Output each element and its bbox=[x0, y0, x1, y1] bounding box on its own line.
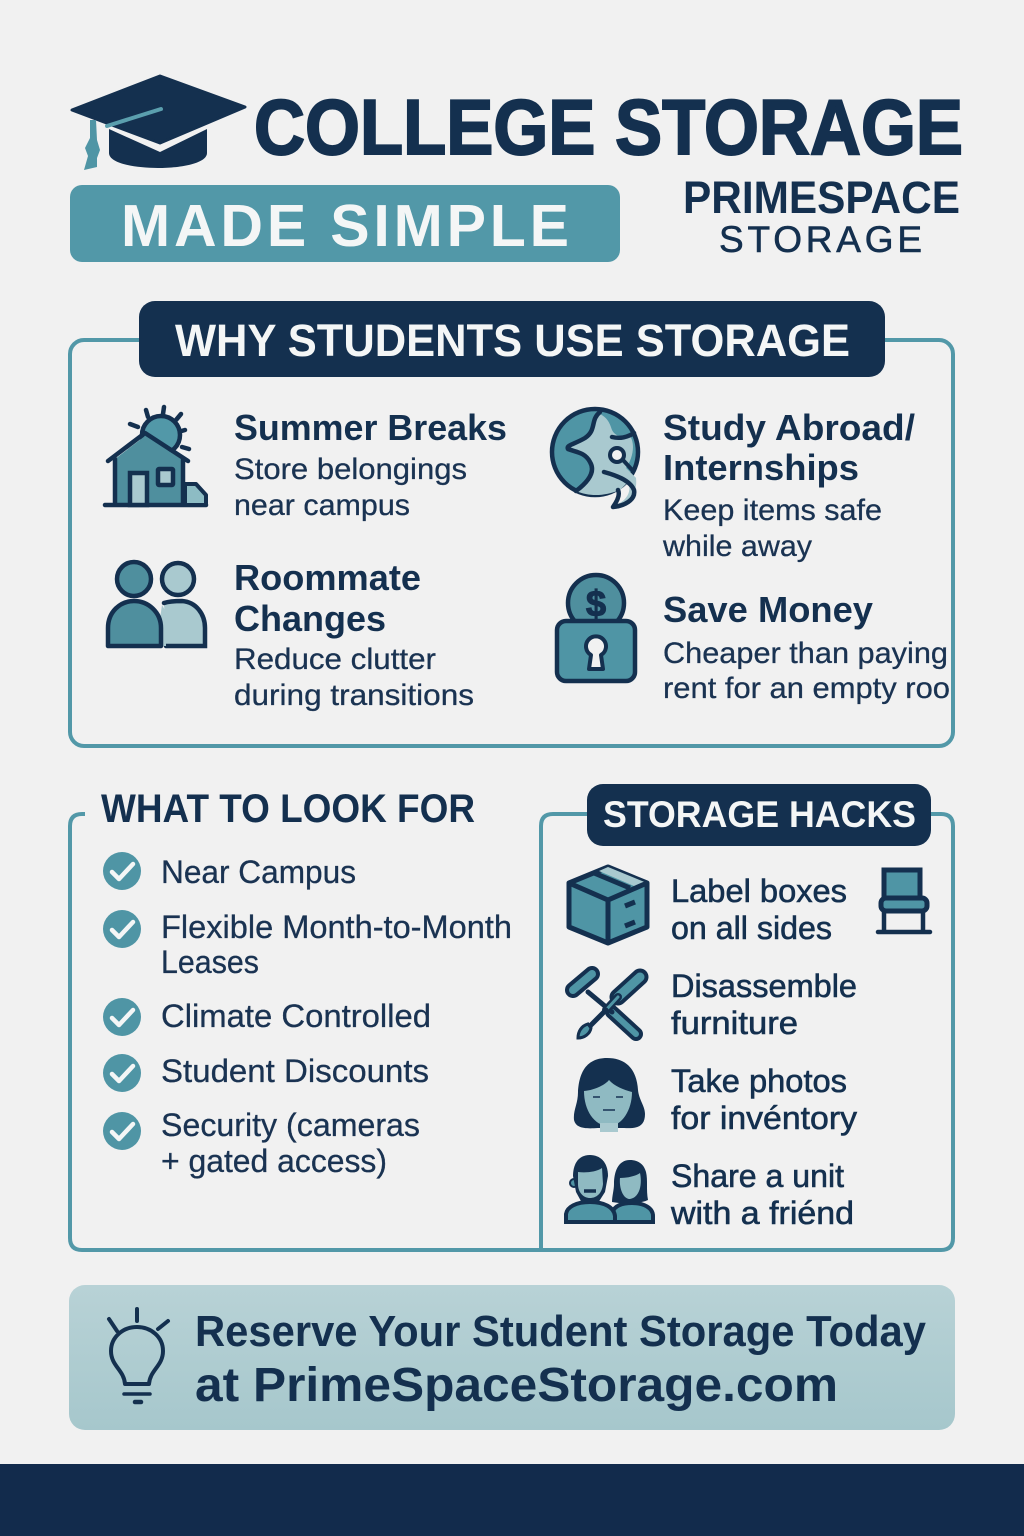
item: save money: rent for an empty roo bbox=[663, 672, 950, 705]
item: save money: Save Money bbox=[663, 589, 873, 630]
panel: storage hacks bbox=[541, 784, 953, 1250]
text: take photos: for invéntory bbox=[671, 1100, 857, 1136]
item: study abroad / internships: Internships bbox=[663, 447, 859, 488]
item: roommate changes bbox=[234, 557, 474, 712]
logo: primespace storage bbox=[683, 172, 960, 260]
icon: woman portrait bbox=[574, 1058, 645, 1132]
logo: primespace storage: STORAGE bbox=[719, 219, 922, 260]
icon: chair bbox=[878, 870, 930, 932]
text: reserve call to action bbox=[195, 1307, 926, 1412]
text: reserve call to action: Reserve Your Student Storage Today bbox=[195, 1307, 926, 1356]
banner: made simple bbox=[70, 185, 620, 262]
icon: cardboard box bbox=[569, 867, 647, 943]
panel: what to look for bbox=[70, 787, 541, 1250]
icon: graduation cap bbox=[72, 76, 245, 170]
text: label boxes: on all sides bbox=[671, 910, 832, 946]
item: roommate changes: Changes bbox=[234, 598, 386, 639]
icon: house with sun bbox=[105, 407, 206, 505]
text: label boxes bbox=[671, 873, 847, 946]
icon: two friends bbox=[566, 1155, 653, 1222]
text: disassemble furniture: furniture bbox=[671, 1005, 798, 1041]
text: disassemble furniture bbox=[671, 968, 857, 1041]
checklist: + gated access) bbox=[161, 1143, 387, 1179]
item: study abroad / internships: Study Abroad/ bbox=[663, 407, 915, 448]
item: roommate changes: Reduce clutter bbox=[234, 643, 436, 676]
heading: storage hacks bbox=[587, 784, 931, 846]
text: take photos: Take photos bbox=[671, 1063, 847, 1099]
text: label boxes: Label boxes bbox=[671, 873, 847, 909]
checklist: Near Campus bbox=[161, 854, 356, 890]
checklist: Leases bbox=[161, 944, 259, 980]
text: reserve call to action: at PrimeSpaceStorage.com bbox=[195, 1359, 838, 1412]
icon: hammer and screwdriver bbox=[573, 974, 640, 1038]
checklist: Flexible Month-to-Month bbox=[161, 909, 512, 945]
text: share a unit bbox=[670, 1158, 854, 1231]
icon: globe bbox=[552, 409, 638, 507]
logo: primespace storage: PRIMESPACE bbox=[683, 172, 960, 223]
item: study abroad / internships: while away bbox=[662, 530, 812, 563]
panel: why students use storage bbox=[70, 301, 953, 746]
item: study abroad / internships: Keep items safe bbox=[663, 494, 882, 527]
checklist: Student Discounts bbox=[161, 1053, 429, 1089]
item: summer breaks: near campus bbox=[234, 489, 410, 522]
banner: made simple: MADE SIMPLE bbox=[121, 193, 569, 259]
icon: coin and lock bbox=[557, 575, 635, 681]
heading: what to look for: WHAT TO LOOK FOR bbox=[101, 787, 475, 831]
heading: why students use storage: WHY STUDENTS USE STORAGE bbox=[175, 315, 850, 366]
item: study abroad / internships bbox=[662, 407, 915, 563]
item: save money: Cheaper than paying bbox=[663, 637, 948, 670]
item: save money bbox=[663, 589, 950, 705]
item: roommate changes: during transitions bbox=[234, 679, 474, 712]
title: COLLEGE STORAGE bbox=[254, 83, 963, 171]
text: share a unit: Share a unit bbox=[671, 1158, 844, 1194]
text: disassemble furniture: Disassemble bbox=[671, 968, 857, 1004]
heading: storage hacks: STORAGE HACKS bbox=[603, 794, 916, 835]
icon: coin and lock: $ bbox=[586, 583, 606, 624]
icon: two people bbox=[108, 562, 205, 646]
item: summer breaks: Store belongings bbox=[234, 453, 467, 486]
item: roommate changes: Roommate bbox=[234, 557, 421, 598]
heading: why students use storage bbox=[139, 301, 885, 377]
checklist: Climate Controlled bbox=[161, 998, 431, 1034]
footer bar bbox=[0, 1464, 1024, 1536]
checklist bbox=[103, 852, 512, 1179]
item: summer breaks: Summer Breaks bbox=[234, 407, 507, 448]
icon: light bulb bbox=[109, 1309, 168, 1402]
callout: reserve banner bbox=[69, 1285, 955, 1430]
text: take photos bbox=[671, 1063, 857, 1136]
checklist: Security (cameras bbox=[161, 1107, 420, 1143]
item: summer breaks bbox=[234, 407, 507, 522]
text: share a unit: with a friénd bbox=[670, 1195, 854, 1231]
